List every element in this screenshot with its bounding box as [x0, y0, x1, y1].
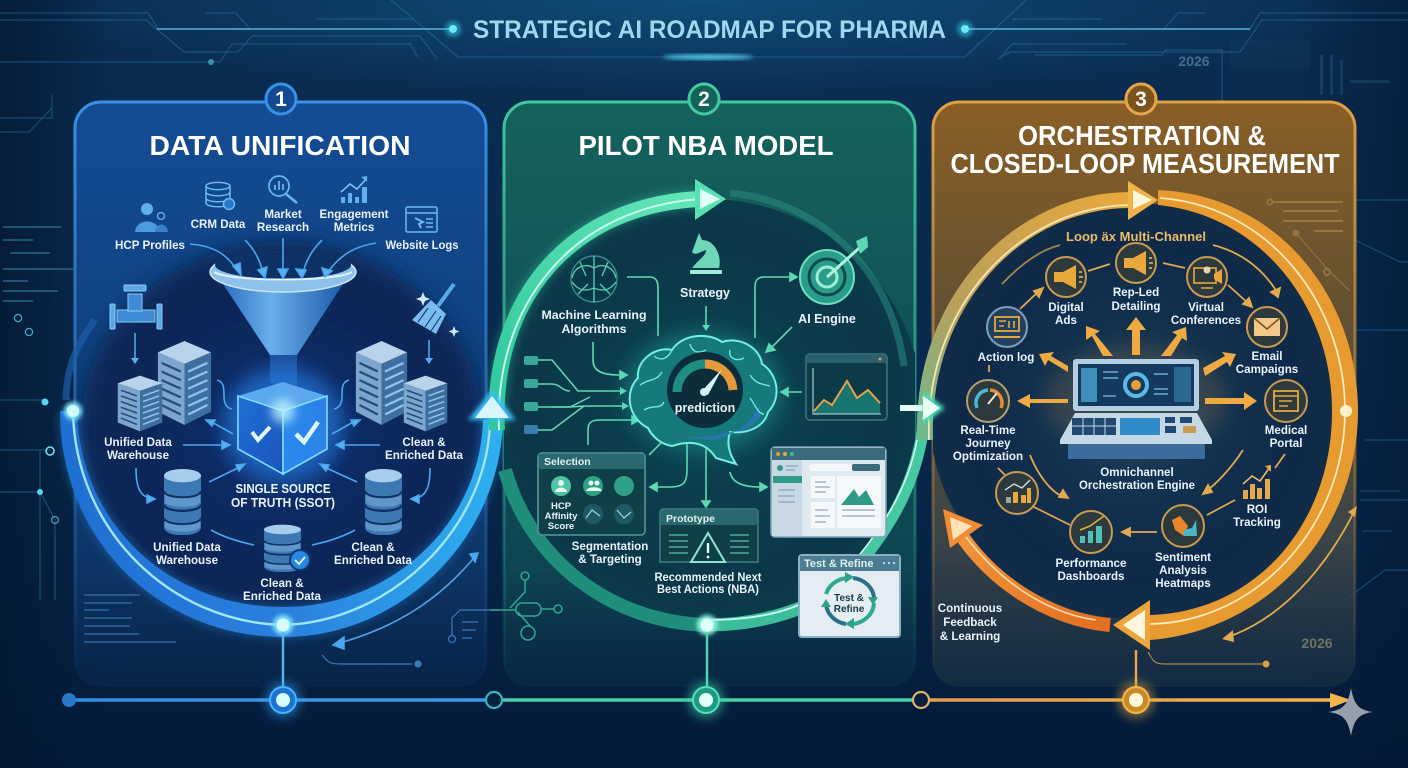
label: clean and enriched 3: Enriched Data	[243, 590, 322, 603]
label: unified data warehouse 2: Unified Data	[153, 541, 221, 554]
badge 2: 2	[698, 88, 710, 111]
label: prediction: prediction	[675, 401, 735, 415]
timeline	[62, 682, 1351, 718]
label: hcp affinity score: Score	[548, 521, 574, 532]
icon: databases	[164, 469, 402, 572]
arrow: strategy to brain	[702, 306, 710, 331]
channel labels: Rep-Led	[1113, 286, 1159, 299]
title	[157, 16, 1250, 60]
label: ai engine: AI Engine	[798, 312, 856, 326]
card: selection	[538, 453, 645, 535]
arrow: return loop thin	[333, 553, 478, 649]
channel labels	[938, 286, 1307, 643]
badge 3	[1126, 84, 1156, 114]
channel labels: Journey	[965, 437, 1011, 450]
icon: broom	[412, 284, 460, 337]
icon: orchestration console	[1046, 345, 1226, 459]
icon: medical portal	[1265, 380, 1307, 422]
icon: crm data	[206, 182, 234, 210]
label: hcp profiles: HCP Profiles	[115, 239, 185, 252]
milestone: pilot	[688, 682, 724, 718]
label: strategy: Strategy	[680, 286, 730, 300]
label: loop multi-channel: Loop äx Multi-Channel	[1066, 229, 1206, 244]
icon: roi tracking	[1243, 465, 1271, 499]
label: clean and enriched	[385, 436, 464, 462]
label: clean and enriched 2: Enriched Data	[334, 554, 413, 567]
ring: orchestration loop	[925, 181, 1358, 700]
arrows: engine to channels	[1017, 317, 1257, 410]
channel labels: Campaigns	[1236, 363, 1298, 376]
icon: engagement metrics	[341, 176, 367, 203]
icon: hcp profiles	[135, 203, 168, 232]
card: dashboard	[771, 447, 886, 537]
label: machine learning algorithms: Algorithms	[562, 322, 627, 336]
label: clean and enriched 2	[334, 541, 413, 567]
icon: target ai engine	[800, 236, 868, 304]
channel labels: Action log	[978, 351, 1034, 364]
label: engagement metrics: Engagement	[320, 208, 389, 221]
year stamp bottom: 2026	[1301, 635, 1333, 651]
channel labels: Sentiment	[1155, 551, 1211, 564]
channel labels: Performance	[1056, 557, 1127, 570]
card: test and refine	[799, 555, 900, 637]
label: recommended next best actions	[654, 571, 762, 596]
channel labels: Email	[1252, 350, 1282, 363]
milestone: data	[265, 682, 301, 718]
icon: knight strategy	[690, 233, 722, 274]
label: test and refine icon text	[834, 593, 865, 615]
panel: orchestration	[468, 84, 1358, 700]
icon: servers left	[118, 341, 211, 431]
heading: data unification: DATA UNIFICATION	[150, 130, 410, 161]
icon: real-time gauge	[967, 380, 1009, 422]
icon: action chart	[996, 472, 1038, 514]
icon: performance dashboards	[1070, 511, 1112, 553]
channel labels: Ads	[1055, 314, 1077, 327]
label: clean and enriched 2: Clean &	[351, 541, 395, 554]
label: single source of truth: SINGLE SOURCE	[236, 481, 331, 496]
icon: email campaigns	[1247, 307, 1287, 347]
arrows around brain	[588, 273, 802, 507]
label: recommended next best actions: Best Actions (NBA)	[657, 583, 759, 596]
channel labels: Medical	[1265, 424, 1307, 437]
icon: rep-led detailing	[1116, 243, 1156, 283]
label: unified data warehouse 2: Warehouse	[156, 554, 219, 567]
arrow: thin return	[1222, 506, 1357, 642]
channel labels: Orchestration Engine	[1079, 479, 1196, 492]
code lines decoration	[84, 594, 176, 643]
label: engagement metrics: Metrics	[334, 221, 374, 234]
label: crm data: CRM Data	[191, 218, 246, 231]
channel labels: Optimization	[953, 450, 1023, 463]
channel labels: Omnichannel	[1100, 466, 1174, 479]
channel labels: Digital	[1048, 301, 1084, 314]
panel: data unification	[60, 84, 503, 700]
channel labels: Detailing	[1112, 300, 1160, 313]
badge 3: 3	[1135, 88, 1147, 111]
badge 1	[266, 84, 296, 114]
label: hcp affinity score	[545, 501, 578, 532]
badge 1: 1	[275, 88, 287, 111]
label: market research	[257, 208, 309, 234]
label: segmentation and targeting: Segmentation	[572, 540, 648, 553]
channel labels: Virtual	[1188, 301, 1224, 314]
label: hcp affinity score: Affinity	[545, 511, 578, 522]
milestone: orchestration	[1118, 682, 1154, 718]
year stamp top: 2026	[1178, 53, 1210, 69]
label: segmentation and targeting: & Targeting	[578, 553, 642, 566]
icon: single source cube	[223, 367, 343, 483]
channel labels: & Learning	[940, 630, 1000, 643]
icon: website logs	[406, 207, 437, 232]
circuit decoration	[490, 572, 562, 640]
channel icons	[967, 243, 1307, 553]
arrow: data to pilot	[468, 390, 516, 480]
icon: market research	[269, 176, 297, 203]
icon: sentiment heatmaps	[1162, 505, 1204, 547]
thin loop arrows	[989, 245, 1285, 536]
card: selection: Selection	[544, 456, 591, 468]
icon: action log	[987, 307, 1027, 347]
heading: pilot nba model: PILOT NBA MODEL	[578, 130, 834, 161]
label: market research: Market	[264, 208, 302, 221]
label: unified data warehouse	[104, 436, 172, 462]
flow input lines	[524, 356, 629, 434]
label: unified data warehouse: Warehouse	[107, 449, 170, 462]
arrows into funnel	[190, 238, 376, 278]
card: prototype: Prototype	[666, 513, 715, 525]
channel labels: Tracking	[1233, 516, 1281, 529]
decoration: top right lines	[1268, 200, 1350, 291]
card: line chart	[806, 354, 887, 420]
channel labels: Conferences	[1171, 314, 1241, 327]
icon: brain with gauge	[625, 332, 781, 464]
heading: orchestration and closed-loop measurement: CLOSED-LOOP MEASUREMENT	[950, 148, 1340, 179]
arrow: bridge pilot to orchestration	[900, 391, 945, 425]
label: single source of truth	[231, 481, 335, 510]
label: clean and enriched: Enriched Data	[385, 449, 464, 462]
label: hcp affinity score: HCP	[551, 501, 572, 512]
label: test and refine icon text: Test &	[834, 593, 864, 604]
icon: servers right	[356, 341, 447, 431]
channel labels: Continuous	[938, 602, 1002, 615]
label: test and refine icon text: Refine	[834, 604, 865, 615]
label: clean and enriched: Clean &	[402, 436, 446, 449]
arrow: broom to servers	[425, 340, 433, 364]
icon: machine learning network	[571, 256, 617, 302]
icon: sparkle star	[1328, 688, 1373, 736]
card: prototype	[660, 509, 758, 562]
icon: funnel	[210, 251, 356, 392]
decoration: bottom right line	[1148, 652, 1270, 668]
card: test and refine: Test & Refine	[804, 558, 873, 570]
label: machine learning algorithms: Machine Learning	[542, 308, 646, 322]
icon: virtual conferences	[1187, 257, 1227, 297]
arrow: pipe to servers	[131, 333, 139, 364]
ring: data loop	[60, 320, 503, 700]
label: market research: Research	[257, 221, 309, 234]
channel labels: Analysis	[1159, 564, 1207, 577]
label: unified data warehouse 2	[153, 541, 221, 567]
icon: digital ads	[1046, 257, 1086, 297]
label: machine learning algorithms	[542, 308, 646, 336]
badge 2	[689, 84, 719, 114]
label: engagement metrics	[320, 208, 389, 234]
label: clean and enriched 3	[243, 577, 322, 603]
icon: pipe	[110, 285, 162, 329]
heading: orchestration and closed-loop measurement: ORCHESTRATION &	[1018, 120, 1266, 151]
label: clean and enriched 3: Clean &	[260, 577, 304, 590]
arrows around cube	[136, 380, 430, 545]
title: STRATEGIC AI ROADMAP FOR PHARMA	[473, 16, 946, 44]
channel labels: Feedback	[943, 616, 997, 629]
heading: orchestration and closed-loop measurement	[950, 120, 1340, 179]
channel labels: Dashboards	[1057, 570, 1125, 583]
label: segmentation and targeting	[572, 540, 648, 566]
channel labels: ROI	[1247, 503, 1267, 516]
channel labels: Portal	[1270, 437, 1302, 450]
label: single source of truth: OF TRUTH (SSOT)	[231, 495, 335, 510]
ring: pilot loop	[497, 179, 923, 700]
label: website logs: Website Logs	[386, 239, 458, 252]
label: recommended next best actions: Recommended Next	[654, 571, 762, 584]
panel: pilot nba model	[490, 84, 923, 700]
channel labels: Heatmaps	[1155, 577, 1211, 590]
label: unified data warehouse: Unified Data	[104, 436, 172, 449]
circuit decoration	[322, 610, 500, 667]
channel labels: Real-Time	[960, 424, 1016, 437]
